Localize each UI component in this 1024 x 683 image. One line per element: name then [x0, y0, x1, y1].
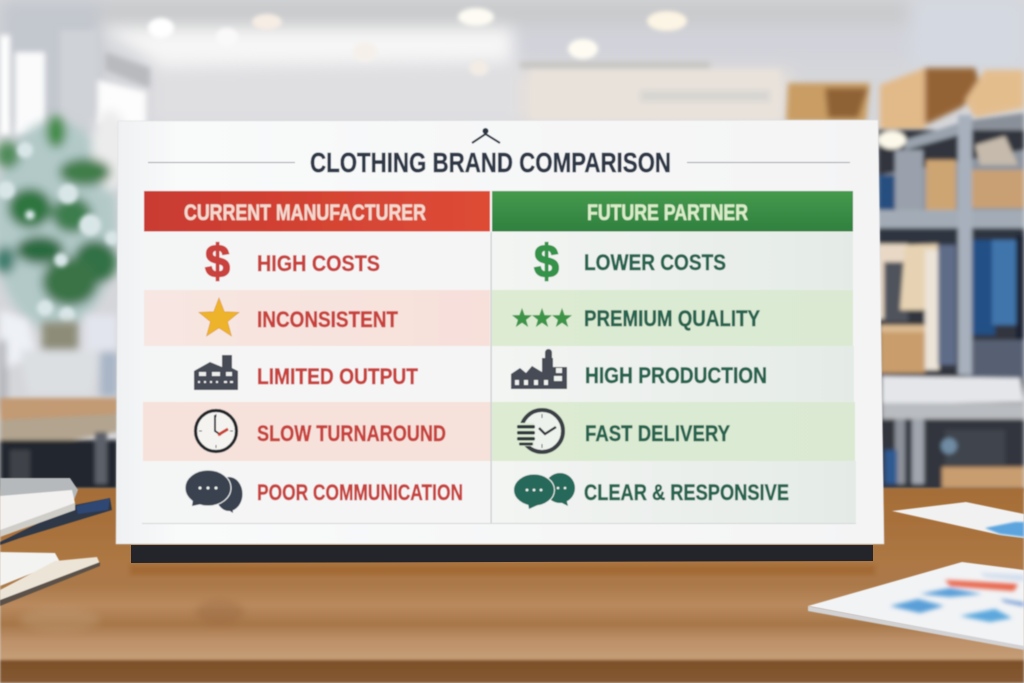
column divider	[490, 232, 492, 523]
icon: three green stars	[512, 308, 572, 327]
row: inconsistent	[144, 290, 490, 346]
background: rear desk	[0, 398, 118, 490]
icon: red dollar: $	[205, 235, 230, 287]
background: shelving with clothes	[878, 113, 1024, 490]
title rule: left	[148, 162, 295, 163]
title: CLOTHING BRAND COMPARISON	[310, 147, 671, 178]
label: high costs: HIGH COSTS	[257, 251, 380, 276]
icon: green speech bubbles	[514, 473, 575, 509]
panel: future partner	[492, 191, 856, 523]
label: premium quality: PREMIUM QUALITY	[584, 306, 760, 331]
row: high production	[492, 346, 854, 402]
header: future partner: FUTURE PARTNER	[587, 200, 748, 225]
row: slow turnaround	[143, 402, 491, 461]
row: high costs	[144, 232, 490, 290]
header: current manufacturer: CURRENT MANUFACTURER	[184, 200, 426, 225]
title rule: right	[687, 162, 850, 163]
header: future partner	[492, 191, 853, 232]
label: slow turnaround: SLOW TURNAROUND	[257, 421, 446, 446]
icon: large factory	[511, 349, 567, 389]
row: premium quality	[492, 290, 853, 346]
label: inconsistent: INCONSISTENT	[257, 307, 398, 332]
row: limited output	[143, 346, 491, 402]
table bottom edge	[142, 523, 856, 524]
icon: green dollar: $	[534, 235, 559, 287]
row: poor communication	[142, 461, 491, 523]
table surface	[0, 488, 1024, 683]
papers: right charts	[808, 502, 1024, 650]
row: lower costs	[492, 232, 853, 290]
label: fast delivery: FAST DELIVERY	[585, 421, 730, 446]
label: poor communication: POOR COMMUNICATION	[257, 480, 463, 505]
label: high production: HIGH PRODUCTION	[585, 363, 767, 388]
comparison card	[116, 120, 884, 544]
icon: fast clock	[514, 410, 563, 452]
row: fast delivery	[492, 402, 855, 461]
icon: wall clock	[196, 410, 236, 452]
label: limited output: LIMITED OUTPUT	[257, 364, 418, 389]
background: plant	[0, 110, 128, 410]
panel: current manufacturer	[142, 191, 491, 523]
icon: small factory	[194, 355, 238, 390]
papers: left stack and folder	[0, 478, 112, 606]
label: lower costs: LOWER COSTS	[584, 250, 726, 275]
sign stand base	[131, 545, 873, 563]
icon: gold star	[199, 298, 239, 336]
label: clear and responsive: CLEAR & RESPONSIVE	[584, 480, 789, 505]
icon: dark speech bubbles	[185, 470, 242, 513]
row: clear and responsive	[492, 461, 856, 523]
icon: clothes hanger	[472, 128, 500, 143]
header: current manufacturer	[144, 191, 490, 232]
